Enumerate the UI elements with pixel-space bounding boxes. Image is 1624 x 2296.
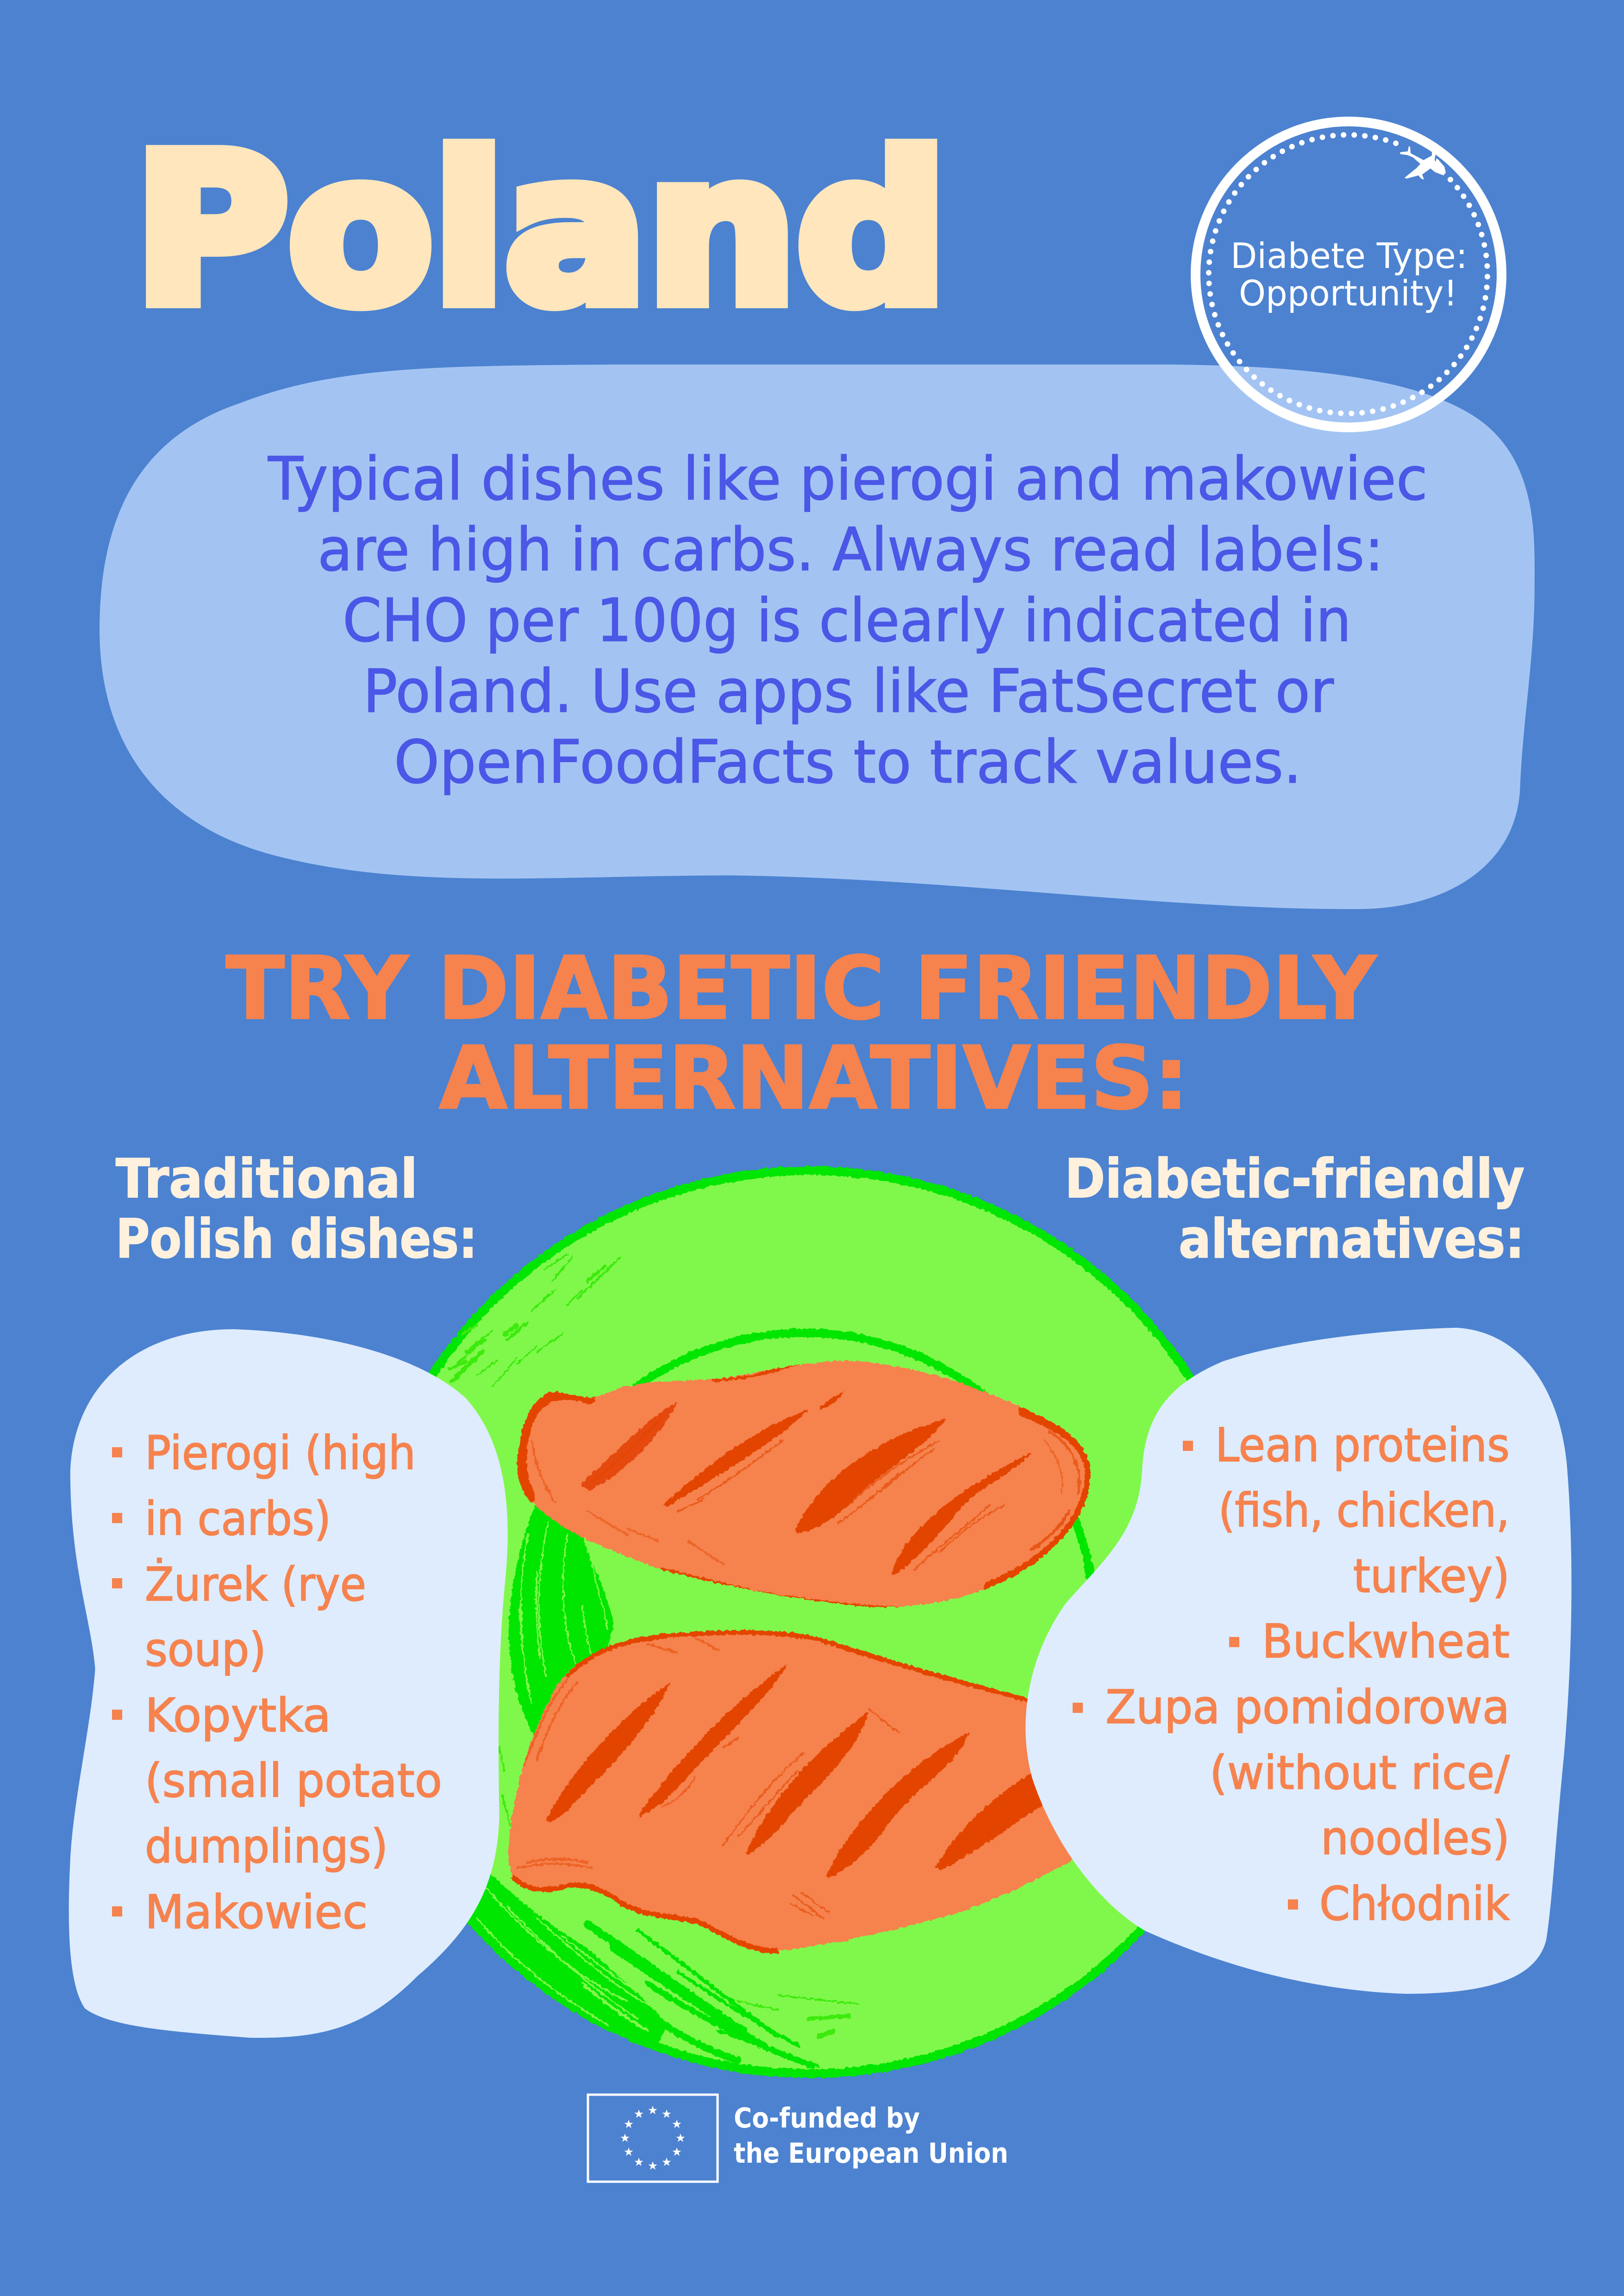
chicken outline strokes: [567, 1632, 1039, 1703]
intro text: Poland. Use apps like FatSecret or: [363, 657, 1334, 726]
heading: traditional Polish dishes: [116, 1148, 477, 1270]
stamp text: Opportunity!: [1239, 273, 1457, 314]
panel: traditional Polish dishes: [69, 1148, 508, 2038]
list: traditional dishes: [112, 1426, 442, 1939]
heading: diabetic-friendly alternatives: alternatives:: [1179, 1208, 1524, 1270]
list: alternatives: Buckwheat: [1262, 1614, 1510, 1668]
list: traditional dishes: (small potato: [145, 1754, 442, 1808]
blob: right list background: [1025, 1328, 1572, 1994]
stamp text: [1230, 235, 1468, 314]
grill marks: [580, 1392, 1032, 1575]
plate: [354, 1166, 1266, 2078]
icon: EU flag outline with stars: [588, 2095, 718, 2182]
heading: try diabetic friendly alternatives: ALTERNATIVES:: [439, 1028, 1189, 1128]
stamp dotted ring: [1209, 135, 1487, 413]
heading: traditional Polish dishes: Polish dishes:: [116, 1208, 477, 1270]
intro text: OpenFoodFacts to track values.: [394, 728, 1302, 797]
intro text: Typical dishes like pierogi and makowiec: [268, 445, 1428, 514]
funding text: [734, 2102, 1008, 2170]
list: alternatives: noodles): [1321, 1811, 1510, 1865]
chicken: upper breast: [517, 1361, 1091, 1609]
list: alternatives: (without rice/: [1210, 1746, 1510, 1800]
blob shape: [100, 365, 1535, 909]
funding text: the European Union: [734, 2137, 1008, 2170]
plate brush texture: [449, 1254, 858, 2066]
list: alternatives: Lean proteins: [1215, 1418, 1510, 1472]
funding text: Co-funded by: [734, 2102, 920, 2134]
list: alternatives: Zupa pomidorowa: [1106, 1680, 1510, 1734]
chicken edge marks: [989, 1411, 1091, 1588]
intro text: [268, 445, 1428, 797]
stamp text: Diabete Type:: [1230, 235, 1468, 276]
illustration: plate with grilled chicken: [428, 1165, 1194, 2079]
blob: left list background: [69, 1329, 508, 2038]
heading: diabetic-friendly alternatives: [1065, 1148, 1524, 1270]
panel: intro blob: [100, 365, 1535, 909]
grill marks: [546, 1665, 1049, 1879]
list: alternatives: (fish, chicken,: [1218, 1483, 1510, 1537]
list: traditional dishes: Makowiec: [145, 1885, 368, 1939]
stamp outer ring: [1195, 121, 1502, 428]
title: Poland: Poland: [134, 112, 947, 349]
list: traditional dishes: in carbs): [145, 1492, 331, 1546]
list: traditional dishes: Kopytka: [145, 1688, 331, 1742]
icon: airplane: [1400, 141, 1446, 180]
list: alternatives: turkey): [1353, 1549, 1510, 1603]
heading: try diabetic friendly alternatives: [226, 938, 1377, 1128]
heading: diabetic-friendly alternatives: Diabetic-friendly: [1065, 1148, 1524, 1210]
list: traditional dishes: soup): [145, 1623, 266, 1677]
heading: traditional Polish dishes: Traditional: [116, 1148, 418, 1210]
list: alternatives: Chłodnik: [1319, 1877, 1510, 1931]
list: traditional dishes: Żurek (rye: [145, 1557, 366, 1612]
heading: try diabetic friendly alternatives: TRY DIABETIC FRIENDLY: [226, 938, 1377, 1039]
list: traditional dishes: Pierogi (high: [145, 1426, 416, 1480]
list: traditional dishes: dumplings): [145, 1819, 388, 1873]
panel: diabetic-friendly alternatives: [1025, 1148, 1572, 1994]
intro text: CHO per 100g is clearly indicated in: [343, 586, 1351, 655]
chicken: lower breast: [508, 1631, 1119, 1951]
stamp badge: Diabete Type Opportunity: [1195, 121, 1502, 428]
list: alternatives: [1073, 1418, 1510, 1931]
logo: co-funded by the European Union: [588, 2095, 1008, 2182]
intro text: are high in carbs. Always read labels:: [318, 516, 1384, 585]
